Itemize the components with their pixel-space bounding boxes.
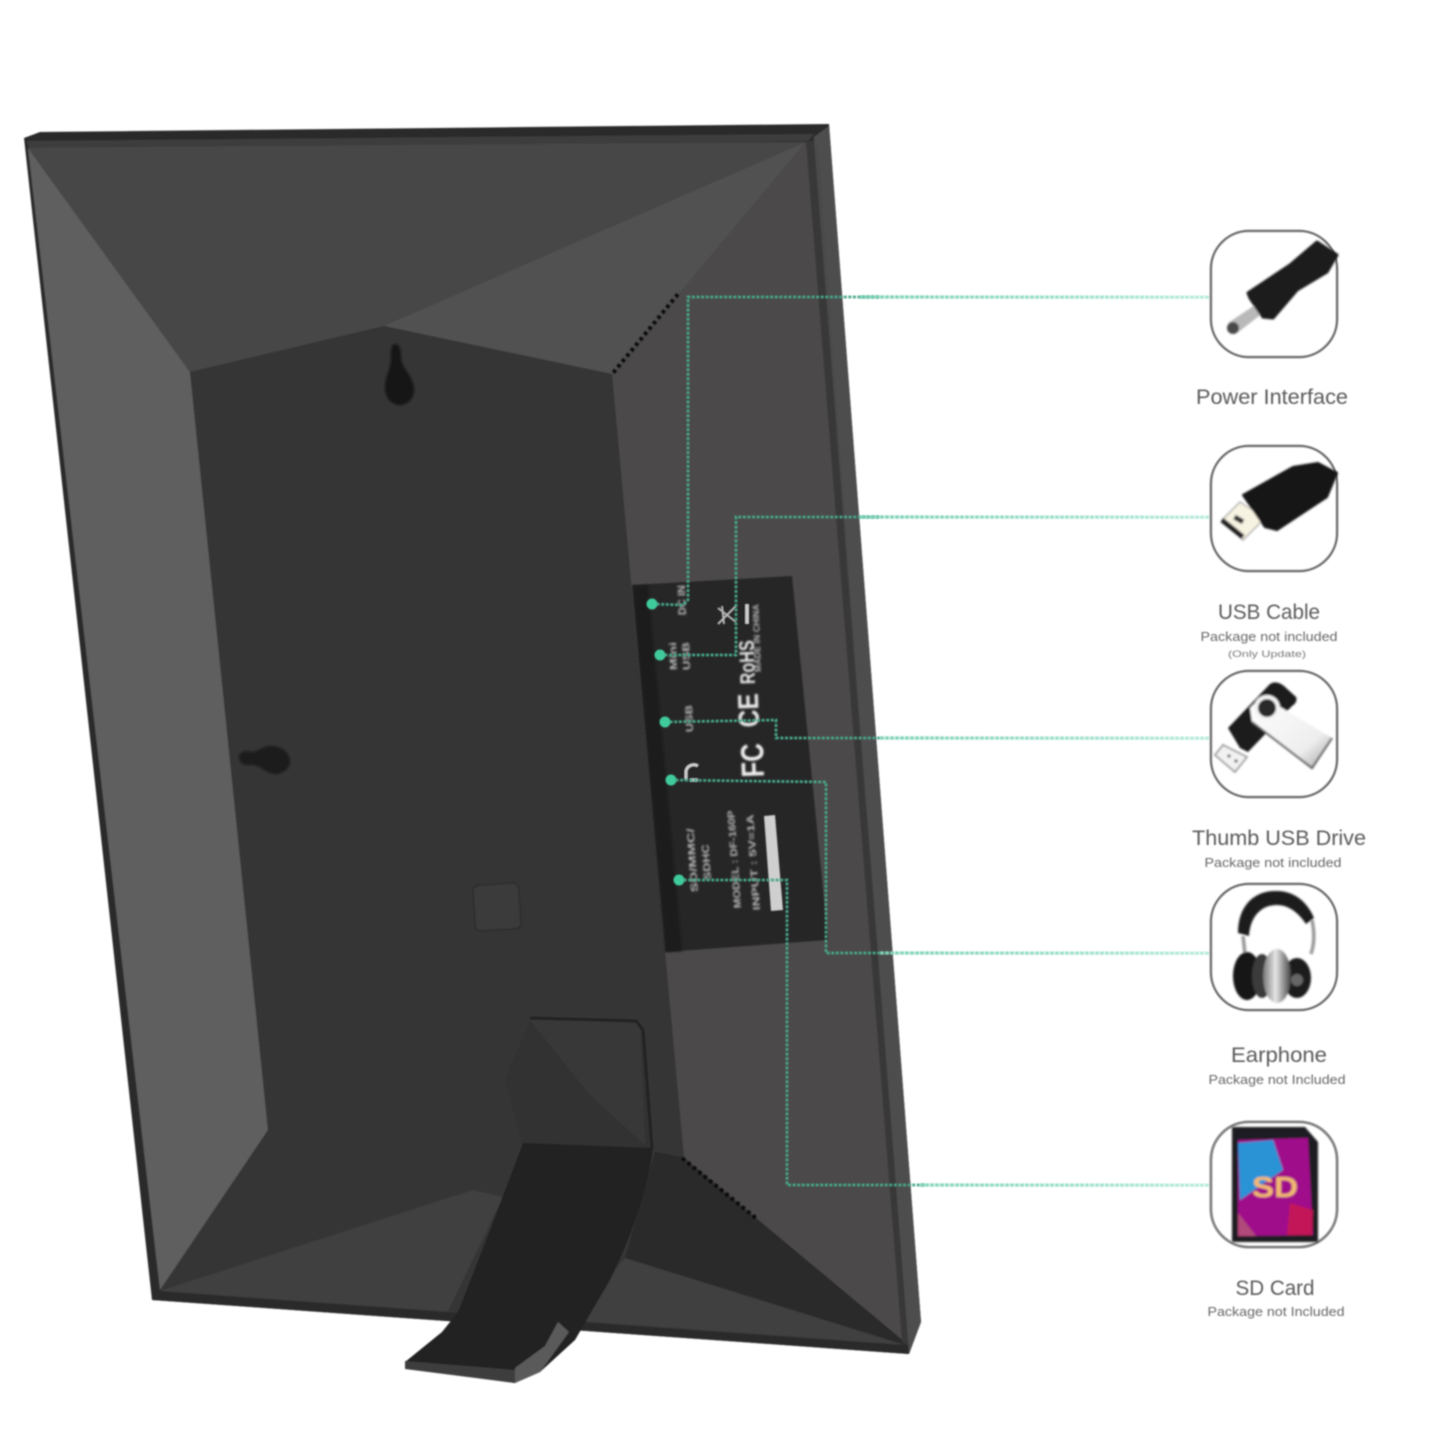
kickstand recess xyxy=(505,1018,652,1148)
inner rim line xyxy=(806,140,908,1345)
icon box xyxy=(1211,446,1337,571)
vent dots bottom xyxy=(682,1158,757,1219)
icon box xyxy=(1211,671,1337,797)
icon: sd card: SD xyxy=(1252,1172,1298,1204)
top rim xyxy=(27,134,814,152)
label text: SDHC xyxy=(701,844,714,881)
label: Thumb USB Drive xyxy=(1192,827,1366,850)
top facet xyxy=(28,142,806,372)
icon: headphone port xyxy=(686,765,698,780)
note line 2: (Only Update) xyxy=(1228,649,1306,659)
white barcode bar xyxy=(764,815,783,911)
item: power interface xyxy=(1196,231,1348,409)
label text: USB xyxy=(684,705,696,732)
right rim xyxy=(814,126,921,1354)
frame outer edge xyxy=(24,124,921,1354)
label: Earphone xyxy=(1231,1044,1327,1067)
bottom right lower facet xyxy=(570,1258,905,1345)
kickstand xyxy=(405,1143,653,1383)
keyhole left xyxy=(239,746,290,774)
label text: RoHS xyxy=(735,640,760,685)
label text: INPUT : 5V=1A xyxy=(745,814,763,911)
line: mini usb xyxy=(660,517,880,655)
label text: MADE IN CHINA xyxy=(751,603,763,672)
item: earphone xyxy=(1208,884,1346,1087)
note: Package not Included xyxy=(1208,1304,1344,1319)
left facet xyxy=(28,148,268,1290)
label: USB Cable xyxy=(1218,601,1320,624)
label text: USB xyxy=(681,642,693,670)
right facet xyxy=(612,142,905,1342)
line: sd card xyxy=(679,880,925,1185)
label text xyxy=(668,585,771,911)
note: Package not included xyxy=(1204,855,1342,870)
label text: FC xyxy=(734,743,771,778)
note: Package not included xyxy=(1200,629,1338,644)
label text: CE xyxy=(733,693,766,728)
icon: recycle bin mark xyxy=(718,606,736,624)
central panel xyxy=(160,326,684,1313)
label: Power Interface xyxy=(1196,386,1348,409)
connector lines xyxy=(652,297,925,1185)
label plate xyxy=(632,576,828,952)
icon: usb drive xyxy=(1215,682,1332,772)
label text: DC IN xyxy=(676,585,689,615)
line: earphone xyxy=(671,780,880,953)
label text: MODEL : DF-160P xyxy=(726,810,744,909)
icon: usb plug xyxy=(1222,463,1337,540)
item: usb cable xyxy=(1200,446,1338,659)
rating label xyxy=(632,576,828,952)
icon box xyxy=(1211,231,1337,357)
photo frame back xyxy=(24,124,921,1383)
icon: headphones xyxy=(1233,891,1314,1003)
item: thumb usb drive xyxy=(1192,671,1366,870)
icon: sd card xyxy=(1232,1127,1318,1242)
note: Package not Included xyxy=(1208,1072,1346,1087)
label shaded left edge xyxy=(633,585,682,952)
square button xyxy=(472,882,522,932)
upper right facet xyxy=(384,142,806,374)
keyhole top xyxy=(385,344,414,405)
label: SD Card xyxy=(1236,1277,1314,1300)
label text: SD/MMC/ xyxy=(686,828,701,893)
dash mark xyxy=(745,604,749,624)
icon box xyxy=(1211,884,1337,1010)
line: usb xyxy=(665,720,880,738)
icon: power plug xyxy=(1227,242,1337,334)
icon box xyxy=(1211,1122,1337,1247)
connector fades xyxy=(860,297,1210,1185)
connector dots xyxy=(646,598,684,886)
item: sd card xyxy=(1208,1122,1344,1319)
line: power xyxy=(652,297,880,605)
vent dots top xyxy=(613,294,678,373)
label text: Mini xyxy=(668,642,680,670)
bottom left facet xyxy=(160,1190,503,1313)
bottom edge shadow xyxy=(152,1291,909,1354)
bottom right dark facet xyxy=(625,1152,905,1345)
